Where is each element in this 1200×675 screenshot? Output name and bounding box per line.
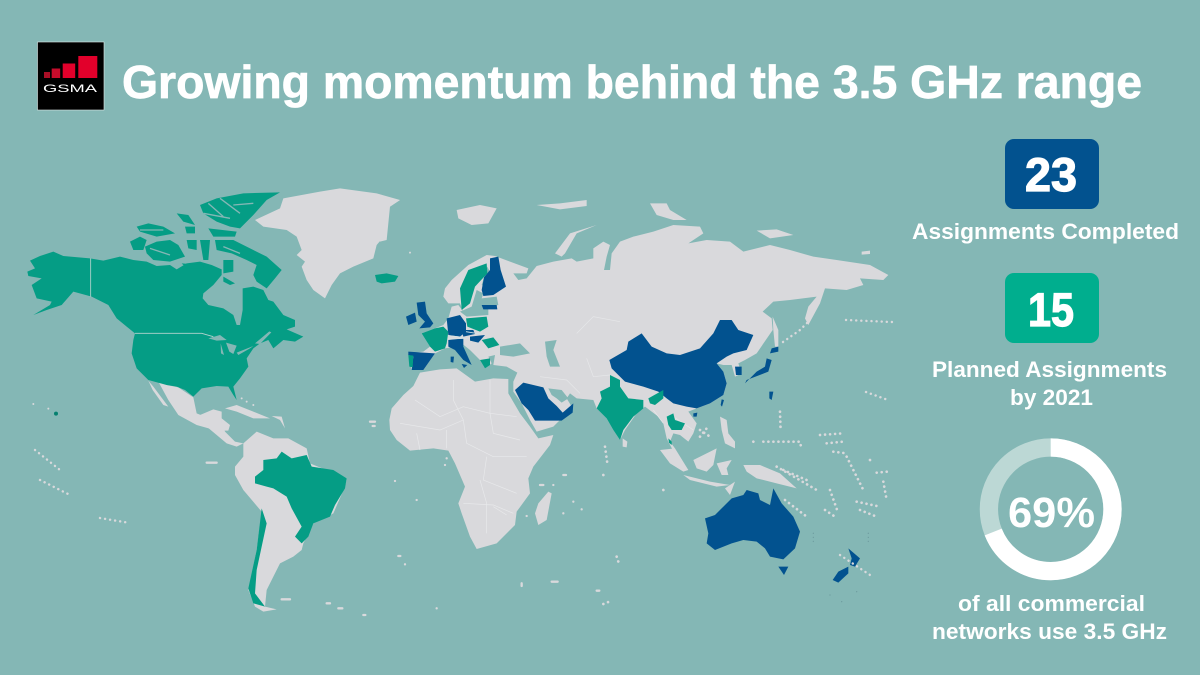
Canadian Arctic islands [130, 192, 282, 288]
stat: 69 percent donut chart: networks use 3.5 GHz [932, 619, 1167, 644]
stat: planned assignments: 15 [1028, 283, 1074, 336]
GSMA logo: GSMA [43, 83, 98, 95]
stat: 69 percent donut chart: of all commercial [958, 591, 1145, 616]
stat: assignments completed: 23 [1025, 148, 1077, 201]
assignments completed countries [406, 257, 778, 421]
stat: assignments completed [912, 139, 1179, 244]
stat: planned assignments: by 2021 [1010, 385, 1093, 410]
North America and Greenland [27, 188, 410, 431]
far-east Russian and Pacific island dots [35, 320, 892, 575]
GSMA logo [38, 42, 104, 110]
title: Growing momentum behind the 3.5 GHz range [122, 56, 1142, 108]
Oceania and South-East Asia [603, 412, 887, 604]
stat: planned assignments [932, 273, 1167, 410]
stat: 69 percent donut chart [932, 447, 1167, 644]
planned assignments countries [408, 263, 685, 440]
stat: assignments completed: Assignments Completed [912, 219, 1179, 244]
stat: planned assignments: Planned Assignments [932, 357, 1167, 382]
Africa and South America [197, 368, 599, 615]
Eurasia [380, 200, 888, 450]
stat: 69 percent donut chart: 69% [1008, 489, 1095, 537]
world map [27, 188, 892, 615]
